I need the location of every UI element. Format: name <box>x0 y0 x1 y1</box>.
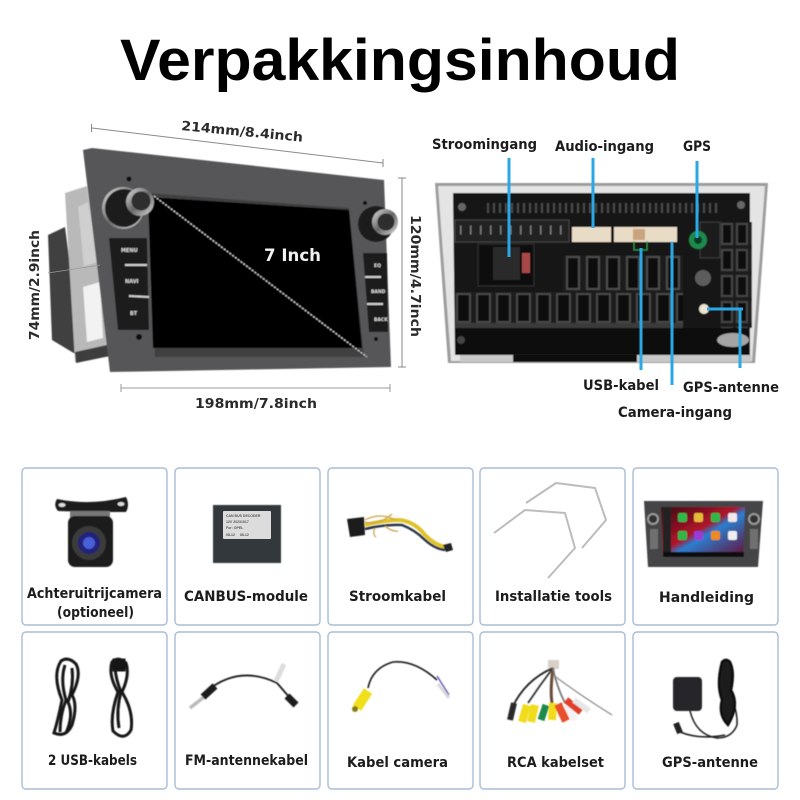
device front illustration <box>48 148 398 372</box>
icon: radio with app screen <box>644 501 763 567</box>
height dimension right: 120mm/4.7inch <box>407 215 422 337</box>
label: Camera-ingang: Camera-ingang <box>618 405 732 421</box>
device front illustration: BACK <box>374 317 388 323</box>
label: Handleiding <box>659 590 754 606</box>
width dimension top <box>92 119 383 167</box>
label: Audio-ingang <box>555 139 654 228</box>
label: Achteruitrijcamera <box>27 586 162 602</box>
depth dimension left <box>28 230 100 340</box>
icon: CANBUS module: CAN BUS DECODER <box>226 514 261 518</box>
card: CANBUS-module <box>175 468 320 625</box>
device front illustration: NAVI <box>125 279 139 285</box>
label: USB-kabel: USB-kabel <box>583 378 659 394</box>
label: GPS-antenne <box>683 309 779 396</box>
card: RCA kabelset <box>480 632 625 789</box>
icon: CANBUS module: 12V 20231017 <box>226 520 249 524</box>
label note: (optioneel) <box>57 605 134 621</box>
icon: FM antenna cable <box>190 664 296 708</box>
label: FM-antennekabel <box>185 753 308 769</box>
label: RCA kabelset <box>507 755 604 771</box>
width dimension bottom <box>121 384 390 412</box>
icon: CANBUS module: For: OPEL <box>226 526 244 530</box>
panel: front view of radio with dimensions <box>28 119 422 412</box>
card: GPS-antenne <box>633 632 778 789</box>
icon: RCA cable set <box>510 660 612 722</box>
icon: CANBUS module: 08-12 08-12 <box>226 533 249 537</box>
icon: USB cables <box>54 659 132 736</box>
rear chassis illustration <box>435 183 768 363</box>
icon: removal tools <box>494 483 606 578</box>
card: Achteruitrijcamera <box>22 468 167 625</box>
icon: GPS antenna <box>673 660 737 738</box>
icon: reversing camera <box>55 497 128 567</box>
icon: yellow RCA camera cable <box>352 662 449 712</box>
width dimension bottom: 198mm/7.8inch <box>195 397 317 412</box>
label: GPS <box>683 139 711 238</box>
icon: power cable <box>347 514 453 552</box>
card: Kabel camera <box>328 632 473 789</box>
label: Stroomkabel <box>349 589 446 605</box>
panel: rear view of radio with connectors <box>432 137 779 421</box>
device front illustration: EQ <box>374 263 381 269</box>
card: Installatie tools <box>480 468 625 625</box>
device front illustration: MENU <box>121 248 138 254</box>
label: Stroomingang <box>432 137 537 257</box>
label: Stroomingang: Stroomingang <box>432 137 537 153</box>
icon: CANBUS module <box>213 505 281 563</box>
label: Installatie tools <box>495 589 612 605</box>
label: Audio-ingang: Audio-ingang <box>555 139 654 155</box>
height dimension right <box>398 178 422 367</box>
card: Stroomkabel <box>328 468 473 625</box>
title: Verpakkingsinhoud <box>120 28 680 93</box>
label: 2 USB-kabels <box>48 753 137 769</box>
label: GPS-antenne: GPS-antenne <box>683 380 779 396</box>
screen size label: 7 Inch <box>264 246 321 266</box>
label: GPS-antenne <box>662 755 758 771</box>
device front illustration: BT <box>130 311 138 317</box>
card: FM-antennekabel <box>175 632 320 789</box>
width dimension top: 214mm/8.4inch <box>181 119 303 146</box>
device front illustration: BAND <box>371 289 386 295</box>
label: CANBUS-module <box>184 589 308 605</box>
depth dimension left: 74mm/2.9inch <box>28 230 43 340</box>
card: 2 USB-kabels <box>22 632 167 789</box>
card: Handleiding <box>633 468 778 625</box>
label: GPS: GPS <box>683 139 711 155</box>
label: Kabel camera <box>347 755 448 771</box>
